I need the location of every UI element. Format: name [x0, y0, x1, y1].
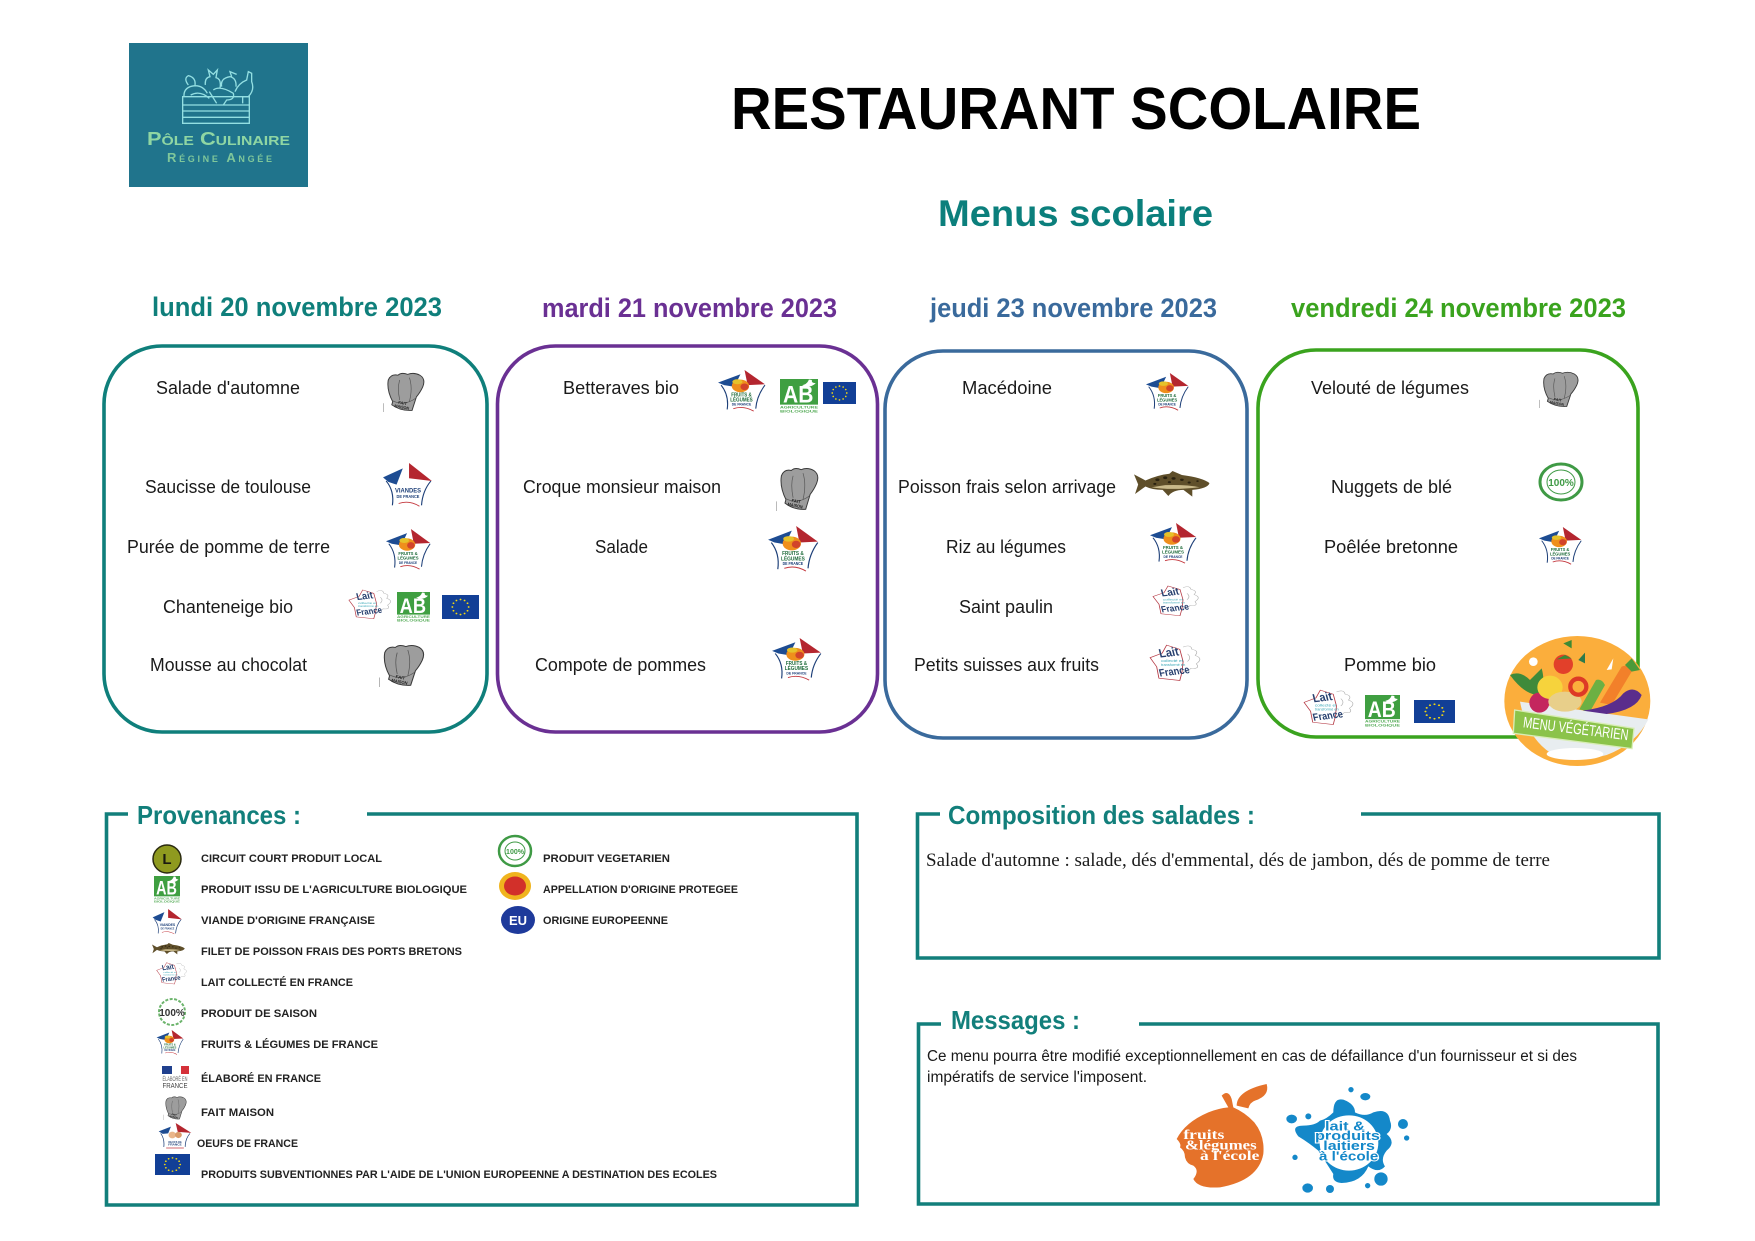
logo: Pôle Culinaire	[129, 43, 308, 187]
icon: fruits et légumes de France	[1146, 373, 1188, 410]
heading: messages: Messages :	[951, 1005, 1080, 1035]
dish: nuggets: Nuggets de blé	[1331, 477, 1452, 497]
icon: fait maison	[1539, 372, 1578, 408]
icon: lait de France	[349, 590, 391, 619]
legend: viande	[153, 909, 375, 934]
icon: produit végétarien	[1540, 464, 1582, 500]
icon: vegetable crate	[183, 70, 253, 123]
logo: lait et produits laitiers à l'école: à l'école	[1319, 1150, 1378, 1164]
legend: Union européenne: PRODUITS SUBVENTIONNES PAR L'AIDE DE L'UNION EUROPEENNE A DESTINATION DES ECOLES	[201, 1169, 717, 1181]
dish: macédoine: Macédoine	[962, 378, 1052, 398]
panel: lundi	[104, 346, 487, 732]
dish: velouté: Velouté de légumes	[1311, 378, 1469, 398]
legend: origine européenne: ORIGINE EUROPEENNE	[543, 915, 668, 927]
legend: produit végétarien: 100%	[506, 849, 525, 856]
icon: agriculture biologique	[1365, 695, 1400, 727]
legend: agriculture biologique	[154, 876, 467, 903]
dish: saucisse: Saucisse de toulouse	[145, 477, 311, 497]
icon: Union européenne	[1414, 700, 1455, 723]
panel: mardi	[498, 346, 878, 732]
legend: élaboré en France: ÉLABORÉ EN FRANCE	[201, 1072, 321, 1085]
panel: composition des salades	[918, 800, 1659, 958]
heading: jeudi: jeudi 23 novembre 2023	[929, 293, 1217, 323]
legend: élaboré en France	[162, 1066, 321, 1090]
icon: fait maison	[379, 645, 424, 687]
dish: chanteneige: Chanteneige bio	[163, 597, 293, 617]
text: composition: Salade d'automne : salade, dés d'emmental, dés de jambon, dés de pomme de terre	[926, 850, 1550, 871]
dish: poêlée: Poêlée bretonne	[1324, 537, 1458, 557]
legend: lait	[157, 962, 353, 989]
legend: produit végétarien: PRODUIT VEGETARIEN	[543, 853, 670, 865]
icon: fruits et légumes de France	[1150, 523, 1196, 563]
icon: lait de France	[1153, 585, 1198, 616]
logo: lait et produits laitiers à l'école: laitiers	[1323, 1139, 1375, 1153]
legend: élaboré en France: FRANCE	[162, 1083, 188, 1090]
legend: AOP: APPELLATION D'ORIGINE PROTEGEE	[543, 884, 738, 896]
heading: lundi: lundi 20 novembre 2023	[152, 292, 442, 322]
text: message	[927, 1048, 1577, 1086]
panel: vendredi	[1258, 350, 1638, 737]
title: RESTAURANT SCOLAIRE	[731, 76, 1421, 142]
legend: agriculture biologique: PRODUIT ISSU DE L'AGRICULTURE BIOLOGIQUE	[201, 884, 467, 896]
heading: vendredi: vendredi 24 novembre 2023	[1291, 293, 1626, 323]
legend: poisson	[152, 943, 462, 958]
legend: oeufs	[159, 1123, 298, 1150]
heading: mardi: mardi 21 novembre 2023	[542, 293, 837, 323]
logo: fruits et légumes à l'école: à l'école	[1200, 1148, 1259, 1163]
badge label: MENU VÉGÉTARIEN	[1522, 714, 1629, 744]
logo: lait et produits laitiers à l'école: lait &	[1325, 1120, 1365, 1134]
legend: poisson: FILET DE POISSON FRAIS DES PORTS BRETONS	[201, 946, 462, 958]
icon: Union européenne	[442, 595, 479, 619]
heading: provenances: Provenances :	[137, 800, 301, 830]
badge: menu végétarien	[1504, 636, 1650, 766]
icon: poisson	[1134, 471, 1209, 497]
dish: saint paulin: Saint paulin	[959, 597, 1053, 617]
icon: fruits et légumes de France	[1539, 527, 1581, 564]
heading: composition: Composition des salades :	[948, 800, 1255, 830]
logo: fruits et légumes à l'école	[1177, 1084, 1267, 1188]
icon: fruits et légumes de France	[768, 526, 818, 571]
legend: saison: PRODUIT DE SAISON	[201, 1008, 317, 1020]
dish: petits suisses: Petits suisses aux fruits	[914, 655, 1099, 675]
dish: mousse: Mousse au chocolat	[150, 655, 307, 675]
dish: croque: Croque monsieur maison	[523, 477, 721, 497]
logo name: Pôle Culinaire	[147, 129, 290, 149]
legend: saison: 100%	[159, 1008, 185, 1019]
panel: messages	[918, 1005, 1658, 1204]
legend: fait maison: FAIT MAISON	[201, 1107, 274, 1119]
icon: produit végétarien: 100%	[1548, 478, 1574, 489]
legend: produit végétarien	[499, 836, 670, 866]
legend: circuit court	[153, 845, 382, 873]
logo: lait et produits laitiers à l'école: produits	[1315, 1129, 1380, 1143]
legend: circuit court: CIRCUIT COURT PRODUIT LOCAL	[201, 853, 382, 865]
text: message: impératifs de service l'imposent.	[927, 1069, 1147, 1086]
logo: fruits et légumes à l'école: &légumes	[1185, 1138, 1257, 1153]
subtitle: Menus scolaire	[938, 193, 1213, 234]
legend: fruits et légumes: FRUITS & LÉGUMES DE FRANCE	[201, 1038, 378, 1051]
icon: fruits et légumes de France	[772, 638, 821, 680]
dish: betteraves: Betteraves bio	[563, 378, 679, 398]
legend: circuit court: L	[162, 851, 172, 868]
dish: salade: Salade	[595, 537, 648, 557]
text: message: Ce menu pourra être modifié exceptionnellement en cas de défaillance d'un fournisseur et si des	[927, 1048, 1577, 1065]
icon: agriculture biologique	[780, 379, 818, 413]
logo: fruits et légumes à l'école: fruits	[1183, 1127, 1224, 1142]
dish: salade d'automne: Salade d'automne	[156, 378, 300, 398]
icon: fruits et légumes de France	[718, 370, 765, 411]
legend: origine européenne: EU	[509, 913, 527, 928]
icon: lait de France	[1304, 690, 1353, 725]
icon: fait maison	[776, 469, 818, 511]
icon: fruits et légumes de France	[386, 529, 430, 569]
icon: fait maison	[383, 373, 424, 412]
icon: Union européenne	[823, 382, 856, 404]
legend: saison	[159, 999, 317, 1025]
legend: lait: LAIT COLLECTÉ EN FRANCE	[201, 976, 353, 989]
icon: agriculture biologique	[397, 592, 430, 622]
dish: purée: Purée de pomme de terre	[127, 537, 330, 557]
legend: origine européenne	[501, 906, 668, 934]
panel: jeudi	[885, 351, 1247, 738]
legend: fait maison	[163, 1097, 274, 1120]
logo: lait et produits laitiers à l'école	[1286, 1087, 1409, 1193]
legend: oeufs: OEUFS DE FRANCE	[197, 1138, 298, 1150]
dish: riz: Riz au légumes	[946, 537, 1066, 557]
legend: viande: VIANDE D'ORIGINE FRANÇAISE	[201, 915, 375, 927]
dish: pomme: Pomme bio	[1344, 655, 1436, 675]
panel: provenances	[106, 800, 857, 1205]
icon: viandes de France	[383, 463, 432, 506]
legend: élaboré en France: ÉLABORÉ EN	[162, 1076, 188, 1083]
logo subtitle: Régine Angée	[167, 150, 272, 165]
dish: compote: Compote de pommes	[535, 655, 706, 675]
dish: poisson: Poisson frais selon arrivage	[898, 477, 1116, 497]
icon: lait de France	[1150, 645, 1200, 680]
legend: Union européenne	[155, 1154, 717, 1181]
legend: AOP	[499, 872, 738, 900]
legend: fruits et légumes	[157, 1030, 378, 1054]
